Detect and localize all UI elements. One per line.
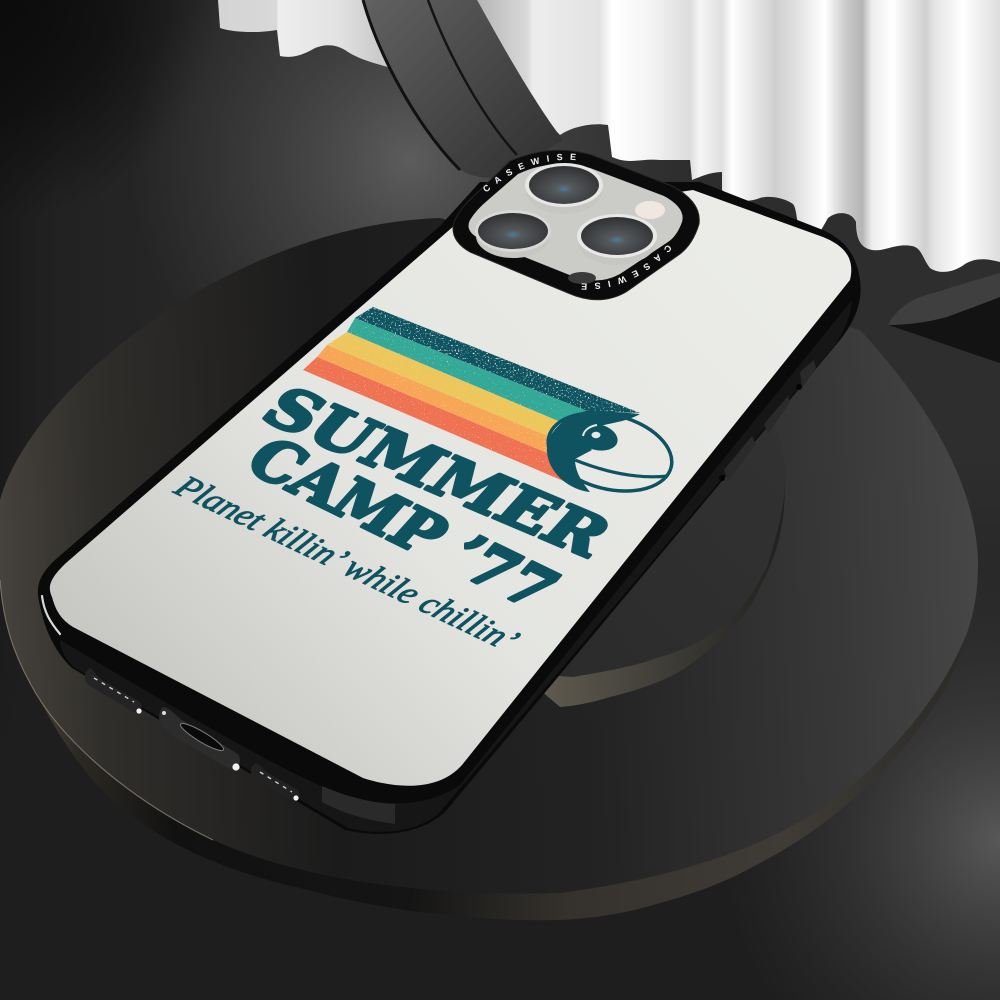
small disc rim bbox=[540, 480, 785, 707]
large disc lit edge bbox=[0, 580, 213, 840]
camera bumper bbox=[453, 150, 699, 300]
microphone bbox=[568, 272, 596, 284]
artwork bbox=[166, 307, 680, 658]
small disc surface bbox=[480, 330, 785, 677]
bottom port: left speaker bbox=[85, 668, 142, 714]
side buttons bbox=[719, 360, 816, 482]
dark arc stand bbox=[363, 0, 563, 178]
large disc base rim bbox=[0, 500, 967, 920]
rim highlight on bottom corner bbox=[322, 786, 395, 824]
bottom port: charging bbox=[159, 707, 240, 771]
side wall gloss bbox=[60, 300, 852, 832]
case body bbox=[38, 182, 861, 834]
bottom port: right speaker bbox=[251, 763, 300, 801]
planet outline bbox=[540, 401, 680, 503]
lens left bbox=[475, 210, 551, 258]
rim highlight on left corner bbox=[42, 596, 60, 634]
tagline: Planet killin’ while chillin’ bbox=[166, 469, 528, 658]
flash bbox=[635, 201, 665, 219]
retro stripes bbox=[303, 307, 640, 483]
phone back panel bbox=[50, 190, 851, 786]
brand text top: CASEWISE bbox=[483, 154, 576, 192]
brand text bottom: CASEWISE bbox=[582, 246, 671, 290]
large disc platform bbox=[0, 218, 978, 894]
curtain: top right bbox=[477, 0, 1000, 272]
planet dish ring bbox=[583, 425, 597, 436]
camera module bbox=[452, 150, 700, 300]
heading SUMMER: SUMMER bbox=[248, 375, 627, 569]
planet dish centre bbox=[592, 432, 600, 438]
planet dark side bbox=[547, 410, 640, 492]
remaining stripes bbox=[303, 318, 587, 483]
planet emblem bbox=[540, 401, 680, 503]
lens top bbox=[525, 163, 603, 214]
lens right bbox=[577, 214, 657, 265]
right stand bbox=[888, 273, 1000, 363]
small disc platform bbox=[480, 330, 785, 707]
planet equator bbox=[575, 460, 668, 477]
dark teal stripe bbox=[355, 307, 640, 413]
heading CAMP 77: CAMP ’77 bbox=[232, 425, 573, 622]
curtain: top left fragment bbox=[218, 0, 392, 68]
camera glass bbox=[468, 164, 683, 281]
phone case bbox=[38, 182, 861, 834]
planet dish bbox=[573, 419, 621, 455]
